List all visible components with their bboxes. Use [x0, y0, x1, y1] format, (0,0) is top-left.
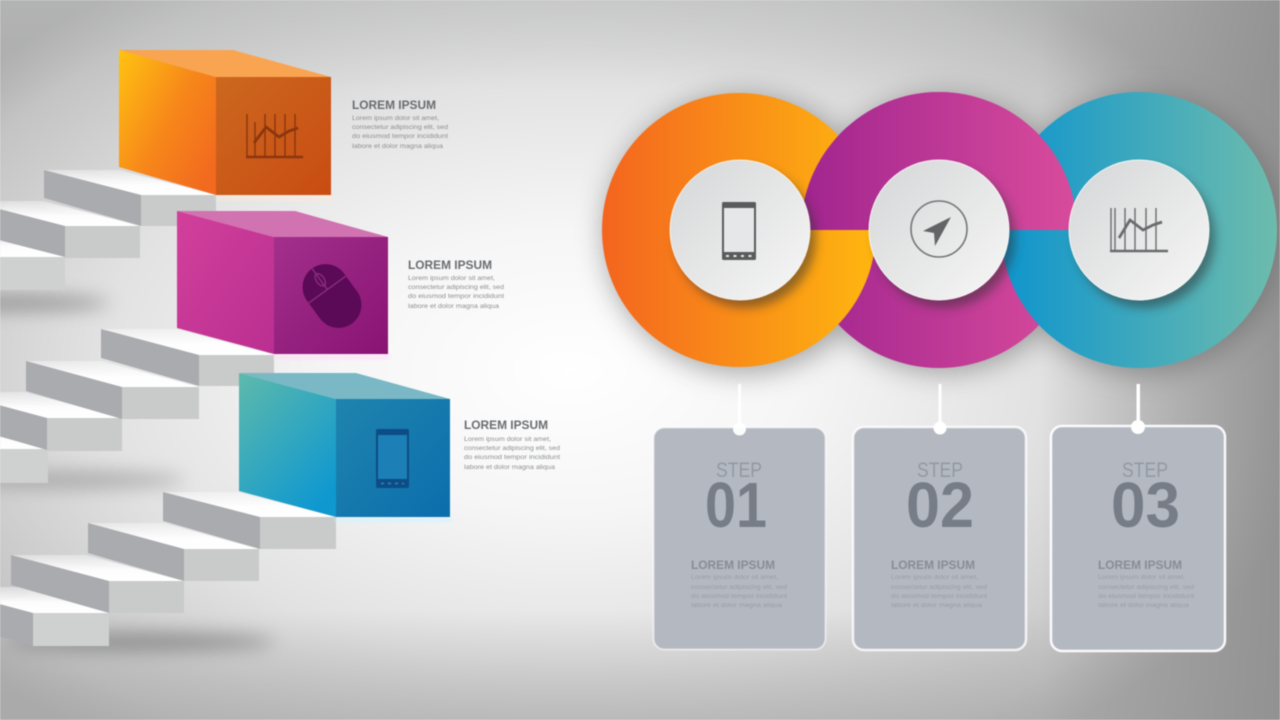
ring shadows: [604, 95, 1280, 373]
text block: magenta cube: Lorem ipsum dolor sit amet,: [408, 275, 495, 282]
text block: orange cube: labore et dolor magna aliqua: [352, 143, 443, 150]
card text: LOREM IPSUM: [891, 558, 975, 572]
card text: consectetur adipiscing elit, sed: [891, 584, 987, 591]
disc: chart: [1069, 160, 1209, 300]
text block: blue cube: Lorem ipsum dolor sit amet,: [464, 436, 551, 443]
text block: magenta cube: LOREM IPSUM: [408, 258, 492, 272]
text block: orange cube: do eiusmod tempor incididunt: [352, 133, 448, 140]
step label: STEP: [917, 459, 963, 482]
card text: labore et dolor magna aliqua: [691, 602, 782, 609]
text block: orange cube: [352, 98, 448, 150]
disc shadows: [676, 168, 1215, 308]
card body: [853, 427, 1026, 650]
text block: orange cube: LOREM IPSUM: [352, 98, 436, 112]
panel: step 02 card: [853, 384, 1026, 650]
text block: blue cube: LOREM IPSUM: [464, 418, 548, 432]
text block: orange cube: consectetur adipiscing elit, sed: [352, 124, 448, 131]
card text: [1098, 558, 1194, 609]
cube: blue: [239, 373, 452, 522]
connector: [733, 384, 746, 436]
stairs: middle flight: [0, 329, 274, 483]
card text: Lorem ipsum dolor sit amet,: [691, 574, 778, 581]
text block: blue cube: labore et dolor magna aliqua: [464, 464, 555, 471]
card text: consectetur adipiscing elit, sed: [1098, 584, 1194, 591]
card text: do eiusmod tempor incididunt: [1098, 593, 1194, 600]
icon: line chart on orange cube: [246, 114, 303, 157]
text block: magenta cube: consectetur adipiscing elit, sed: [408, 284, 504, 291]
step label: STEP: [1122, 459, 1168, 482]
ring: magenta lower half: [801, 92, 1077, 368]
card text: Lorem ipsum dolor sit amet,: [1098, 574, 1185, 581]
disc: phone: [670, 160, 810, 300]
panel: step 03 card: [1051, 384, 1225, 651]
connector: [934, 384, 946, 434]
text block: magenta cube: [408, 258, 504, 310]
step label: STEP: [716, 459, 762, 482]
card text: Lorem ipsum dolor sit amet,: [891, 574, 978, 581]
step label: 01: [705, 469, 767, 541]
icon: compass: [911, 201, 967, 257]
text block: orange cube: Lorem ipsum dolor sit amet,: [352, 115, 439, 122]
stairs: lower flight: [0, 492, 336, 646]
ring: blue: [1001, 92, 1277, 368]
card body: [654, 428, 826, 650]
text block: magenta cube: labore et dolor magna aliqua: [408, 303, 499, 310]
connector: [1131, 384, 1145, 434]
cube: orange: [119, 50, 333, 200]
card text: do eiusmod tempor incididunt: [691, 593, 787, 600]
card text: labore et dolor magna aliqua: [891, 602, 982, 609]
stair shadows: [0, 296, 275, 650]
text block: magenta cube: do eiusmod tempor incididunt: [408, 293, 504, 300]
icon: phone: [722, 202, 756, 260]
icon: line chart: [1110, 208, 1168, 251]
step label: 02: [906, 469, 974, 541]
disc: compass: [869, 160, 1009, 300]
card body: [1051, 426, 1225, 651]
panel: interlocking rings: [602, 92, 1280, 373]
card text: LOREM IPSUM: [1098, 558, 1182, 572]
icon: computer mouse: [293, 255, 371, 337]
cube: magenta: [177, 211, 390, 359]
icon: phone on blue cube: [376, 429, 409, 488]
text block: blue cube: consectetur adipiscing elit, sed: [464, 445, 560, 452]
card text: consectetur adipiscing elit, sed: [691, 584, 787, 591]
panel: step 01 card: [654, 384, 826, 650]
card text: LOREM IPSUM: [691, 558, 775, 572]
text block: blue cube: do eiusmod tempor incididunt: [464, 454, 560, 461]
card text: [691, 558, 787, 609]
panel: staircase with cubes: [0, 50, 560, 650]
card text: do eiusmod tempor incididunt: [891, 593, 987, 600]
ring: magenta upper half: [804, 92, 1075, 231]
card text: labore et dolor magna aliqua: [1098, 602, 1189, 609]
ring: orange: [602, 93, 876, 367]
step label: 03: [1111, 469, 1180, 541]
text block: blue cube: [464, 418, 560, 471]
stairs: upper flight: [0, 170, 216, 290]
card text: [891, 558, 987, 609]
